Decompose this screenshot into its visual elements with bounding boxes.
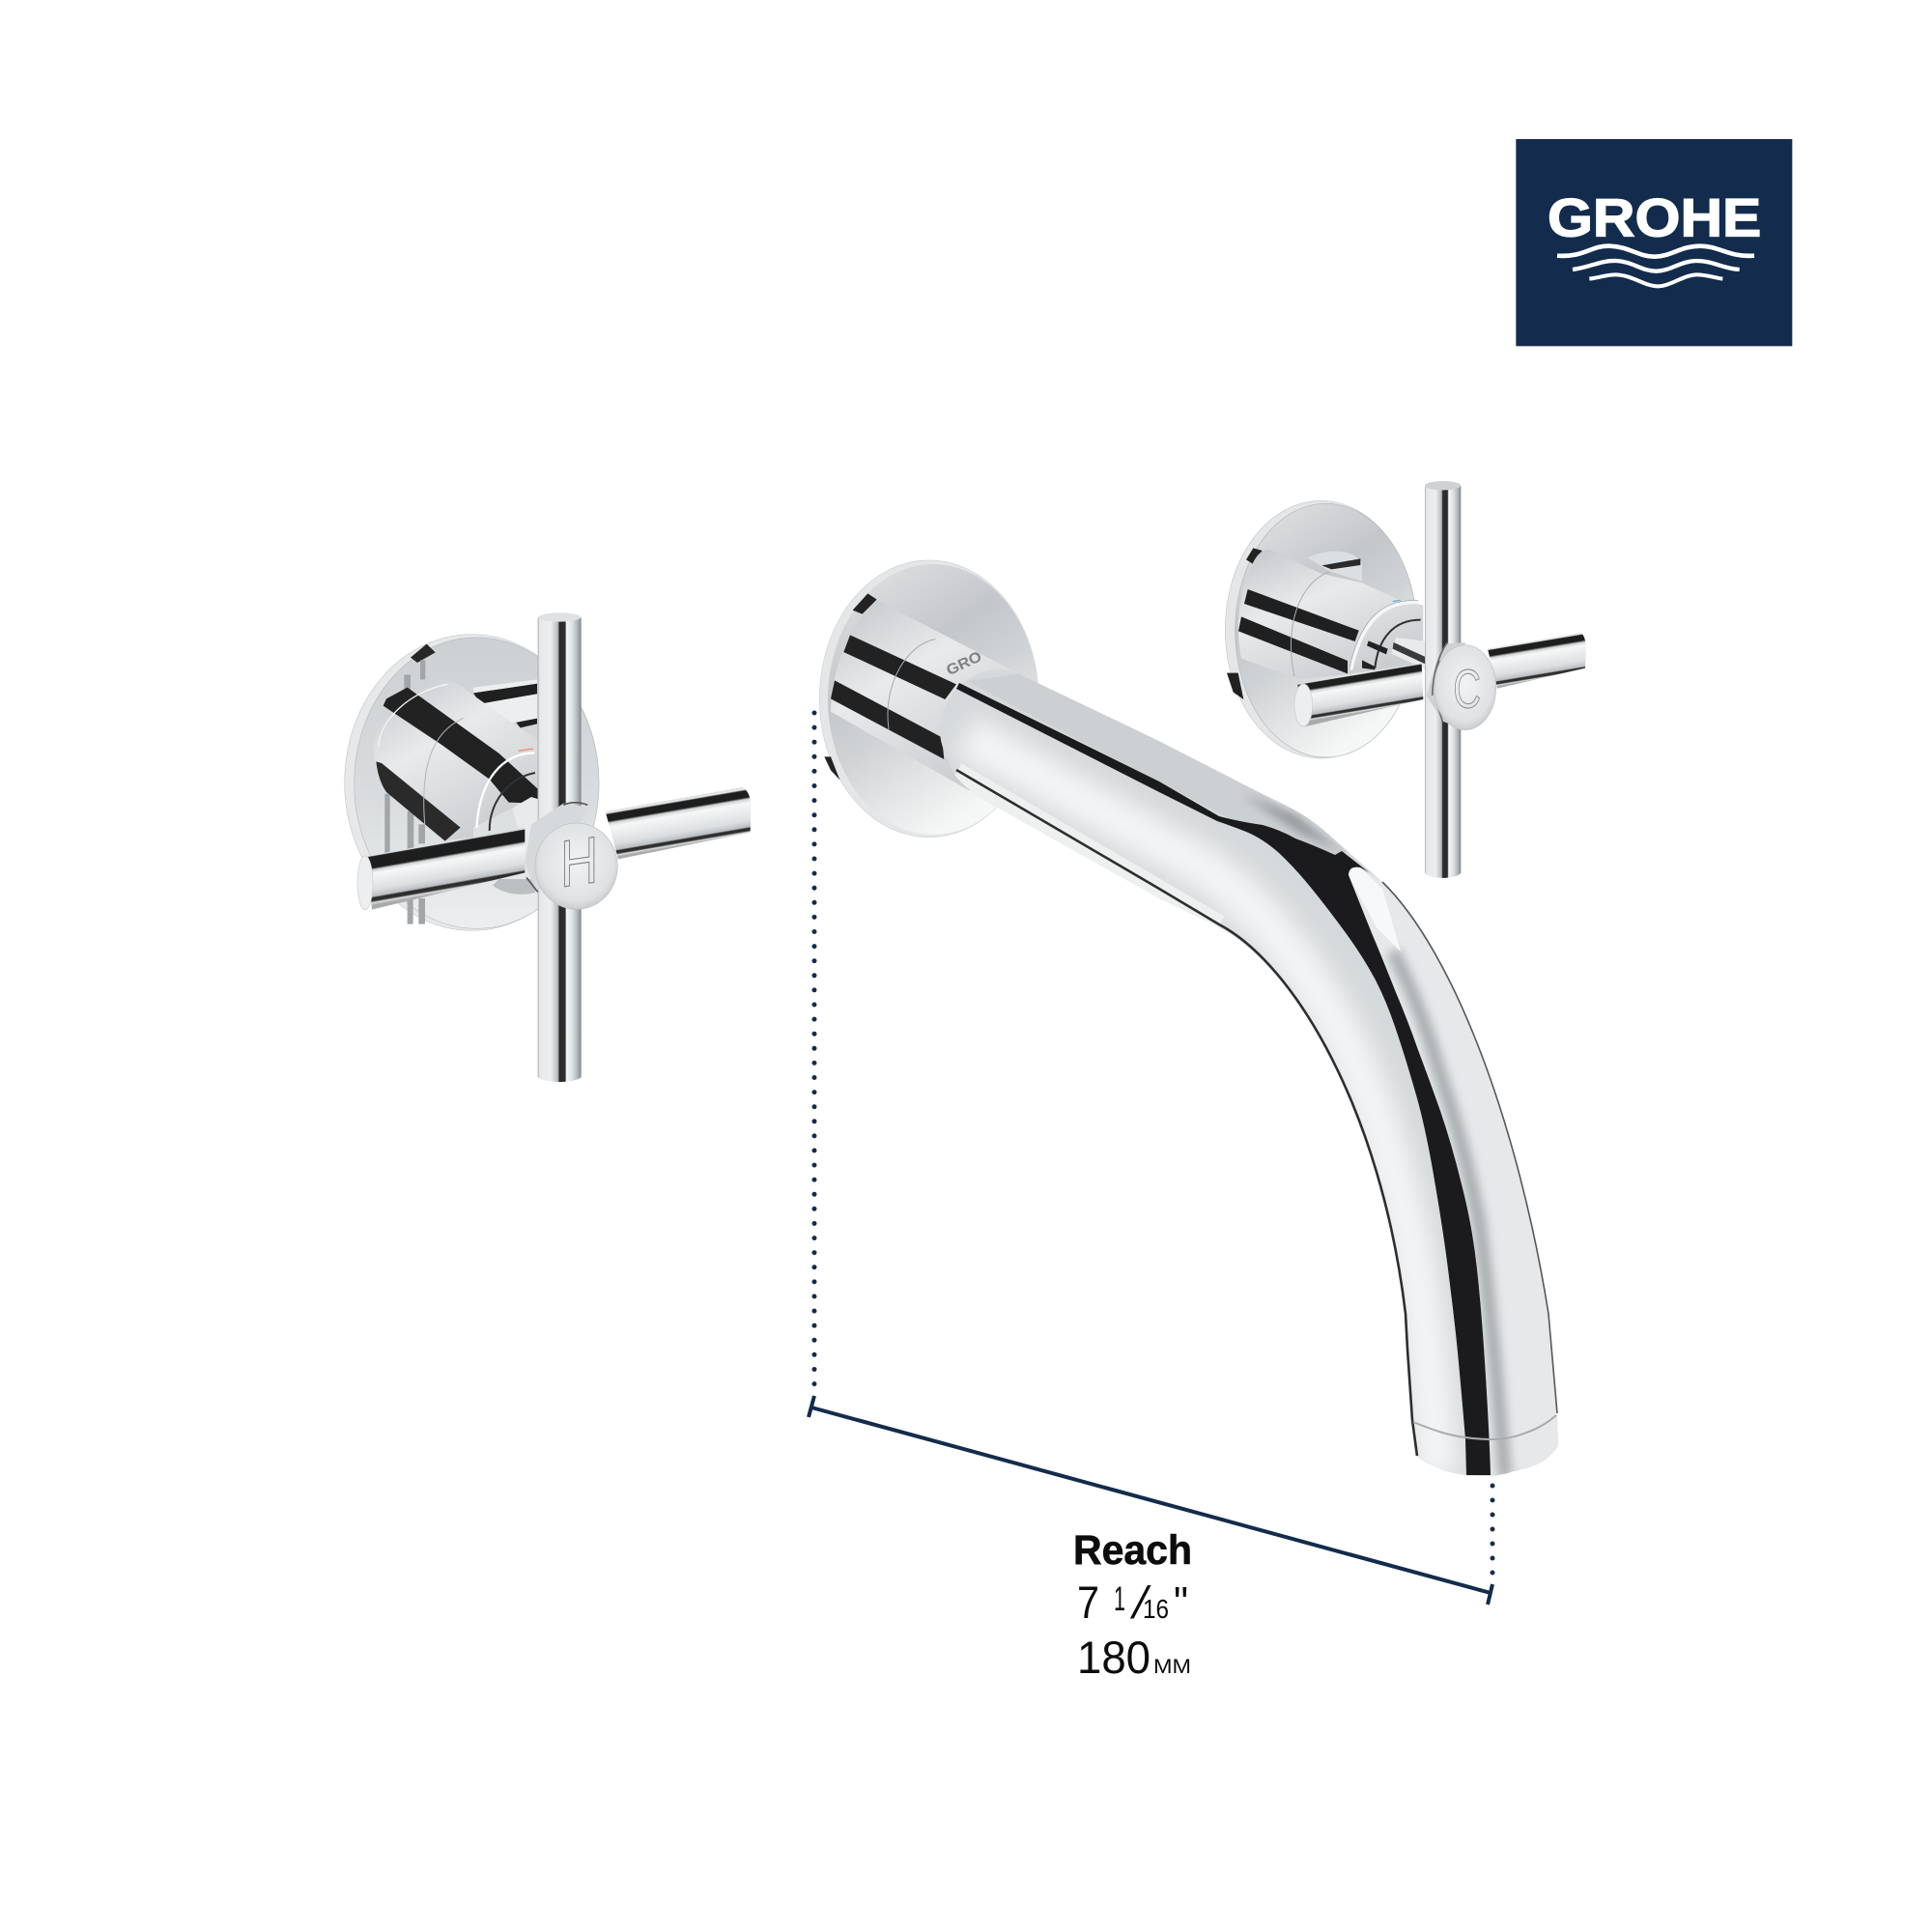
spout tip ring [1413,1415,1556,1439]
reach label: 16 [1143,1594,1169,1624]
reach dimension line [809,1396,1492,1605]
logo: GROHE badge [1516,139,1792,346]
spout collar [831,601,1017,790]
spout outer edge [1382,882,1557,1413]
handle valve body [1238,549,1447,683]
reach label: Reach [1073,1527,1192,1574]
infographic canvas [344,139,1793,1673]
spout [940,669,1584,1478]
handle wall plate [1225,500,1417,758]
spout shading [956,673,1584,1478]
handle hub with H mark [525,803,617,909]
handle hub with H mark: H [560,822,598,901]
handle right lever [1488,633,1586,689]
spout dark reflection [956,683,1491,1475]
handle hub with C mark: C [1453,660,1481,721]
handle left lever [1294,664,1423,726]
reach label: " [1174,1577,1188,1628]
handle wall plate [345,635,599,930]
handle vertical bar [1425,481,1461,878]
reach label: 180 [1077,1632,1151,1683]
right dotted guide line [1490,1486,1495,1574]
reach label: 1 [1114,1580,1125,1618]
handle left lever [357,828,525,910]
handle valve body [374,679,567,876]
spout wall plate and collar [819,560,1038,838]
left dotted guide line [811,713,817,1384]
spout inner edge line [956,770,1417,1456]
handle right lever [606,787,751,859]
handle vertical bar [538,612,582,1082]
logo waves [1557,246,1754,286]
spout collar brand mark: GRO [944,648,984,679]
spout body [940,669,1558,1476]
reach label: 7 [1077,1577,1099,1628]
reach label [1073,1527,1192,1683]
spout wall plate [819,560,1038,838]
reach label: / [1127,1578,1153,1629]
handle hub with C mark [1427,642,1496,731]
logo wordmark: GROHE [1548,187,1761,248]
right cold-water handle [1225,481,1586,878]
left hot-water handle [345,612,751,1082]
reach label: MM [1153,1656,1191,1678]
